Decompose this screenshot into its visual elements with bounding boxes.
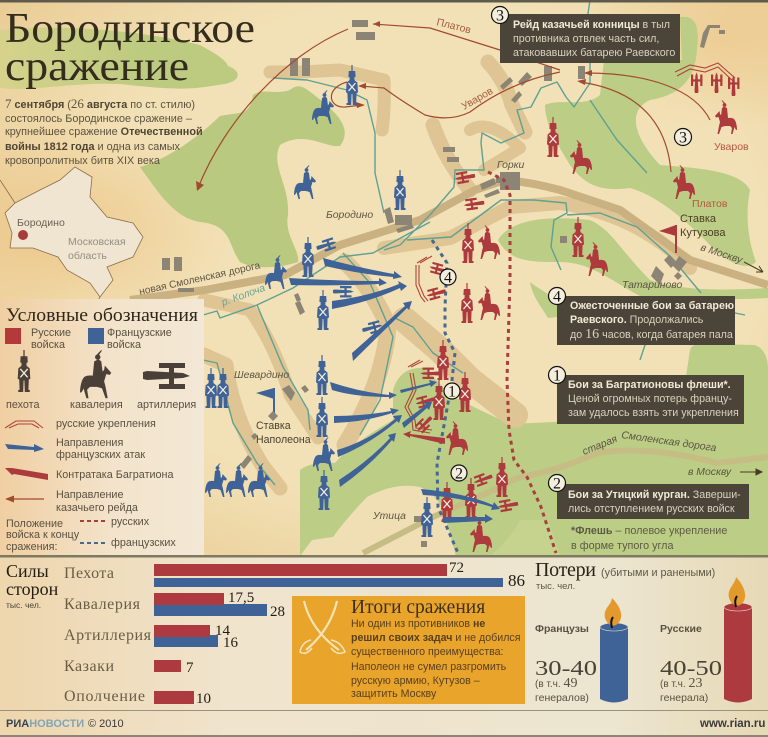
icon: red candle bbox=[724, 577, 752, 702]
callout 1: Bagration fleches: Ценой огромных потерь францу- bbox=[568, 393, 732, 405]
end-of-battle positions: Russian line bbox=[488, 172, 556, 553]
losses: Russian: (в т.ч. 23 bbox=[660, 676, 702, 691]
fortifications bbox=[405, 63, 735, 433]
results text: русскую армию, Кутузов – bbox=[351, 675, 480, 687]
callout 2: Utitsa kurgan: Бои за Утицкий курган. Заверши- bbox=[568, 489, 741, 501]
results text: защитить Москву bbox=[351, 688, 437, 700]
place labels: Ставка bbox=[680, 213, 717, 225]
inset: Moscow region: Московская bbox=[68, 236, 126, 248]
legend: end positions: русских bbox=[111, 516, 150, 528]
panel: legend bbox=[0, 299, 204, 556]
losses: Russian: генерала) bbox=[660, 692, 708, 704]
numbered markers: 1 bbox=[448, 384, 456, 400]
bar chart: forces: Ополчение bbox=[64, 688, 145, 705]
legend: fortifications: русские укрепления bbox=[56, 418, 156, 430]
place labels: Платов bbox=[692, 198, 728, 210]
legend: army colours: Русские bbox=[31, 327, 71, 339]
legend: French attacks bbox=[5, 437, 145, 461]
callout 4: Raevsky battery: Раевского. Продолжались bbox=[570, 314, 704, 326]
bar chart: forces: 7 bbox=[186, 660, 194, 676]
footer: RIA Novosti logo: © 2010 bbox=[88, 718, 124, 730]
heading: forces: сторон bbox=[6, 579, 59, 599]
legend: end positions: Положение bbox=[6, 518, 63, 530]
callout 2: Utitsa kurgan bbox=[557, 484, 749, 519]
place labels: Шевардино bbox=[234, 370, 289, 381]
losses: French: 30-40 bbox=[535, 656, 597, 680]
bar chart: forces: Кавалерия bbox=[64, 596, 141, 613]
map background bbox=[0, 0, 768, 556]
numbered markers: 2 bbox=[455, 466, 463, 482]
heading: losses: (убитыми и ранеными) bbox=[601, 567, 715, 579]
place labels: новая Смоленская дорога bbox=[138, 260, 262, 298]
legend: French attacks: французских атак bbox=[56, 449, 145, 461]
inset: Moscow region: Бородино bbox=[17, 217, 65, 229]
numbered markers: 1 bbox=[553, 368, 561, 384]
callout 2: Utitsa kurgan: лись отступлением русских войск bbox=[568, 503, 735, 515]
losses: French bbox=[535, 598, 628, 704]
numbered markers: 4 bbox=[444, 270, 452, 286]
icon: blue candle bbox=[600, 598, 628, 702]
Russian troops bbox=[413, 72, 739, 552]
numbered markers: 3 bbox=[496, 8, 504, 24]
footer: RIA Novosti logo: РИАНОВОСТИ bbox=[6, 718, 84, 730]
results text: Ни один из противников не bbox=[351, 618, 485, 630]
legend: army colours: Французские bbox=[107, 327, 172, 339]
callout 3: Cossack raid bbox=[500, 14, 680, 63]
results text: Наполеон не сумел разгромить bbox=[351, 661, 507, 673]
intro text: крупнейшее сражение Отечественной bbox=[5, 126, 203, 138]
intro text: 7 сентября (26 августа по ст. стилю) bbox=[5, 96, 195, 111]
losses: French: генералов) bbox=[535, 692, 589, 704]
footnote: *Флешь – полевое укрепление bbox=[571, 525, 727, 537]
legend: raid direction: Направление bbox=[56, 489, 123, 501]
place labels: Татариново bbox=[622, 280, 682, 291]
legend: raid direction: казачьего рейда bbox=[56, 502, 138, 514]
heading: forces bbox=[6, 561, 59, 610]
French troops bbox=[205, 65, 433, 537]
footnote bbox=[571, 525, 727, 552]
place labels bbox=[138, 17, 763, 522]
numbered markers bbox=[440, 6, 692, 492]
bar chart: forces: 14 bbox=[215, 623, 230, 639]
rivers bbox=[203, 0, 745, 485]
results text: существенного преимущества: bbox=[351, 646, 503, 658]
place labels: Уваров bbox=[714, 141, 749, 153]
legend: end positions bbox=[6, 516, 176, 553]
footer: website: www.rian.ru bbox=[699, 718, 765, 730]
intro text: войны 1812 года и одна из самых bbox=[5, 141, 181, 153]
buildings bbox=[162, 20, 725, 547]
callout 1: Bagration fleches: зам удалось взять эти укрепления bbox=[568, 407, 739, 419]
title bbox=[5, 6, 255, 90]
legend: unit icons: кавалерия bbox=[70, 399, 123, 411]
callout 4: Raevsky battery: Ожесточенные бои за батарею bbox=[570, 300, 734, 312]
legend: unit icons: артиллерия bbox=[137, 399, 196, 411]
heading: forces: тыс. чел. bbox=[6, 600, 41, 610]
bar chart: forces: 72 bbox=[449, 560, 464, 576]
legend: army colours: войска bbox=[31, 339, 65, 351]
place labels: Кутузова bbox=[680, 227, 726, 239]
place labels: Утица bbox=[372, 511, 406, 522]
intro text bbox=[5, 96, 203, 167]
heading: losses: тыс. чел. bbox=[536, 581, 575, 592]
callout 3: Cossack raid: противника отвлек часть сил, bbox=[513, 33, 659, 45]
footer: RIA Novosti logo bbox=[6, 718, 124, 730]
place labels: Смоленская дорога bbox=[621, 430, 717, 454]
title: сражение bbox=[5, 44, 189, 90]
flag: Napoleon headquarters bbox=[256, 388, 278, 421]
place labels: Ставка bbox=[256, 420, 291, 432]
footnote: в форме тупого угла bbox=[571, 540, 673, 552]
bar chart: forces: 28 bbox=[270, 604, 285, 620]
losses: Russian: 40-50 bbox=[660, 656, 722, 680]
losses: Russian: Русские bbox=[660, 623, 702, 635]
legend: French attacks: Направления bbox=[56, 437, 123, 449]
heading: losses bbox=[535, 559, 715, 592]
place labels: в Москву bbox=[688, 467, 732, 478]
legend heading: Условные обозначения bbox=[6, 305, 198, 326]
results text bbox=[351, 618, 521, 700]
heading: losses: Потери bbox=[535, 559, 596, 581]
bar chart: forces: Пехота bbox=[64, 565, 114, 582]
place labels: в Москву bbox=[699, 242, 744, 266]
inset: Moscow region bbox=[0, 167, 143, 302]
bar chart: forces: Казаки bbox=[64, 658, 114, 675]
results text: решил своих задач и не добился bbox=[351, 632, 521, 644]
title: Бородинское bbox=[5, 6, 255, 52]
numbered markers: 4 bbox=[553, 288, 561, 306]
bar chart: forces: 17,5 bbox=[228, 590, 254, 606]
callout 4: Raevsky battery bbox=[557, 296, 735, 345]
heading: forces: Силы bbox=[6, 561, 49, 581]
place labels: Горки bbox=[497, 160, 525, 171]
place labels: Платов bbox=[435, 17, 472, 36]
inset: Moscow region: область bbox=[68, 250, 107, 262]
intro text: состоялось Бородинское сражение – bbox=[5, 113, 193, 125]
numbered markers: 2 bbox=[553, 476, 561, 492]
French attack arrows bbox=[289, 258, 500, 523]
legend: unit icons: пехота bbox=[6, 399, 40, 411]
flag: Kutuzov headquarters bbox=[659, 225, 677, 253]
end-of-battle positions: French line bbox=[432, 240, 458, 553]
callout 1: Bagration fleches: Бои за Багратионовы флеши*. bbox=[568, 379, 731, 391]
bar chart: forces: 86 bbox=[508, 571, 525, 590]
legend: unit icons bbox=[6, 350, 196, 411]
losses: French: (в т.ч. 49 bbox=[535, 676, 577, 691]
place labels: Наполеона bbox=[256, 434, 311, 446]
legend: end positions: войска к концу bbox=[6, 529, 80, 541]
intro text: кровопролитных битв XIX века bbox=[5, 155, 161, 167]
legend: end positions: французских bbox=[111, 537, 176, 549]
legend: counterattack: Контратака Багратиона bbox=[56, 469, 174, 481]
legend: counterattack bbox=[5, 468, 174, 481]
callout 1: Bagration fleches bbox=[557, 375, 744, 424]
place labels: Уваров bbox=[460, 86, 496, 113]
icon: crossed sabres bbox=[300, 601, 345, 653]
legend: end positions: сражения: bbox=[6, 541, 57, 553]
callout 4: Raevsky battery: до 16 часов, когда батарея пала bbox=[570, 327, 733, 342]
raid routes of Cossacks bbox=[196, 21, 710, 191]
losses: French: Французы bbox=[535, 623, 589, 635]
panel: battle results bbox=[292, 596, 525, 704]
place labels: р. Колоча bbox=[219, 283, 267, 309]
callout 3: Cossack raid: Рейд казачьей конницы в тыл bbox=[513, 19, 670, 31]
Bagration counterattack arrow bbox=[403, 431, 445, 444]
bar chart: forces: 16 bbox=[223, 635, 238, 651]
callout 3: Cossack raid: атаковавших батарею Раевского bbox=[513, 47, 675, 59]
losses: Russian bbox=[660, 577, 752, 704]
bar chart: forces: Артиллерия bbox=[64, 627, 152, 644]
place labels: Бородино bbox=[326, 210, 373, 221]
terrain: forests and hills bbox=[0, 17, 768, 556]
place labels: старая bbox=[581, 434, 619, 458]
bar chart: forces: 10 bbox=[196, 691, 211, 707]
legend: raid direction bbox=[5, 489, 138, 514]
numbered markers: 3 bbox=[679, 130, 687, 146]
legend: army colours: войска bbox=[107, 339, 141, 351]
bar chart: forces bbox=[64, 560, 525, 707]
legend: fortifications bbox=[5, 418, 156, 430]
results heading: Итоги сражения bbox=[351, 597, 485, 618]
legend: army colours bbox=[5, 327, 172, 351]
